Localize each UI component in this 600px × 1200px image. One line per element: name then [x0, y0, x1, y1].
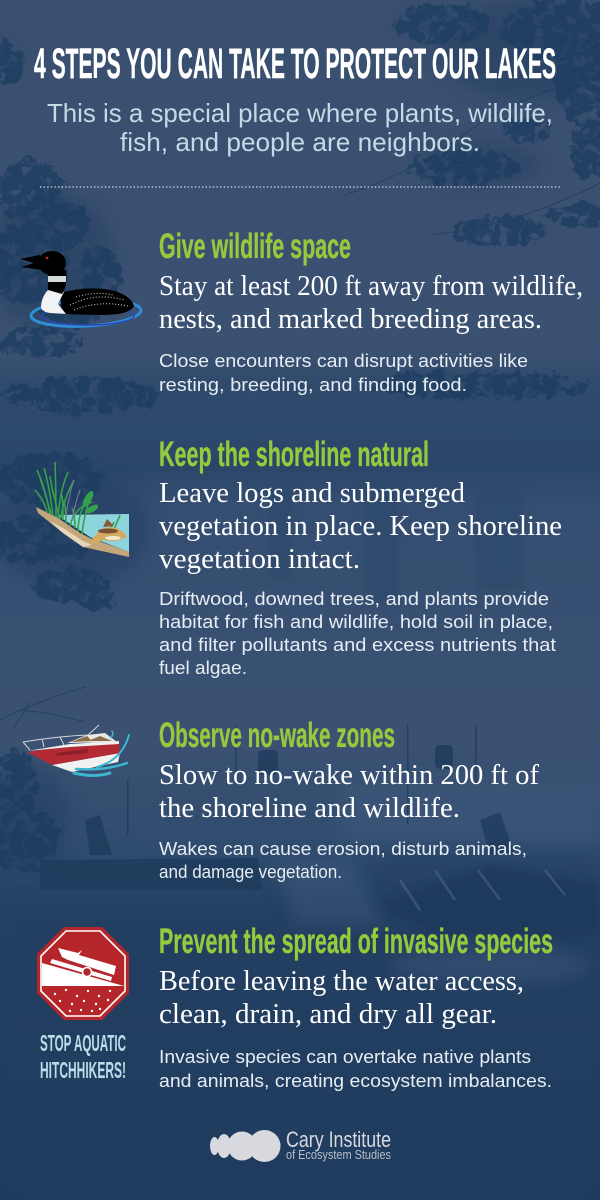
instruction [159, 965, 524, 1030]
heading: Keep the shoreline natural [159, 435, 429, 474]
instruction: vegetation in place. Keep shoreline [159, 510, 562, 542]
panel: keep the shoreline natural [35, 435, 562, 678]
subtitle: fish, and people are neighbors. [120, 127, 480, 157]
logo: Cary Institute of Ecosystem Studies: of Ecosystem Studies [286, 1148, 391, 1162]
instruction: clean, drain, and dry all gear. [159, 998, 497, 1030]
instruction: nests, and marked breeding areas. [159, 303, 542, 335]
instruction: Stay at least 200 ft away from wildlife, [159, 270, 583, 302]
icon: stop aquatic hitchhikers sign [37, 927, 129, 1020]
explanation [159, 839, 527, 882]
instruction: vegetation intact. [159, 543, 360, 575]
instruction: Leave logs and submerged [159, 477, 465, 509]
instruction: the shoreline and wildlife. [159, 792, 460, 824]
explanation: habitat for fish and wildlife, hold soil in place, [159, 612, 553, 632]
panel: prevent the spread of invasive species [37, 922, 553, 1091]
panel: give wildlife space [20, 227, 583, 395]
instruction [159, 759, 539, 824]
icon: red motor boat with wake [23, 725, 129, 776]
explanation: fuel algae. [159, 658, 247, 678]
panel: observe no-wake zones [23, 716, 539, 882]
explanation: Wakes can cause erosion, disturb animals, [159, 839, 527, 859]
sign caption: HITCHHIKERS! [40, 1057, 126, 1083]
icon: loon [20, 251, 142, 329]
explanation [159, 351, 528, 395]
instruction [159, 270, 583, 335]
logo: Cary Institute of Ecosystem Studies [210, 1127, 391, 1162]
heading: Observe no-wake zones [159, 716, 395, 755]
logo: Cary Institute of Ecosystem Studies: Cary Institute [286, 1127, 391, 1152]
explanation [159, 1047, 552, 1091]
instruction: Slow to no-wake within 200 ft of [159, 759, 539, 791]
instruction [159, 477, 562, 575]
instruction: Before leaving the water access, [159, 965, 524, 997]
heading: Give wildlife space [159, 227, 351, 266]
explanation: and damage vegetation. [159, 862, 342, 882]
explanation: Close encounters can disrupt activities like [159, 351, 528, 371]
sign caption: STOP AQUATIC [40, 1030, 126, 1056]
icon: shoreline with plants and fish [35, 462, 129, 557]
subtitle [47, 98, 553, 157]
subtitle: This is a special place where plants, wildlife, [47, 98, 553, 128]
explanation: Invasive species can overtake native plants [159, 1047, 531, 1067]
explanation [159, 589, 556, 678]
explanation: Driftwood, downed trees, and plants provide [159, 589, 549, 609]
explanation: and filter pollutants and excess nutrients that [159, 635, 556, 655]
explanation: and animals, creating ecosystem imbalances. [159, 1071, 552, 1091]
sign caption [40, 1030, 126, 1083]
explanation: resting, breeding, and finding food. [159, 375, 467, 395]
